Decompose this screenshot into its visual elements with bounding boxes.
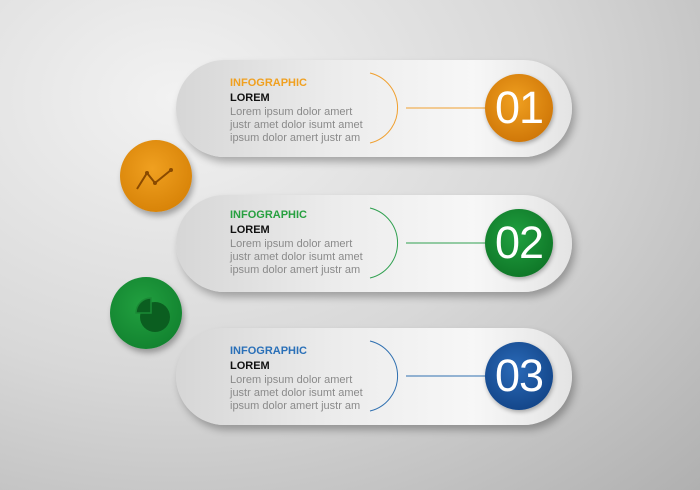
text block 02: INFOGRAPHIC — [230, 209, 307, 221]
panel 03 — [176, 328, 572, 425]
number badge 02: 02 — [495, 217, 543, 268]
text block 01 — [230, 77, 363, 144]
text block 03: justr amet dolor isumt amet — [230, 387, 363, 399]
icon: line chart — [120, 140, 192, 212]
text block 02 — [230, 209, 363, 276]
text block 02: LOREM — [230, 224, 270, 236]
text block 01: LOREM — [230, 92, 270, 104]
panel 02 — [176, 195, 572, 292]
number badge 02 — [485, 209, 553, 277]
text block 01: INFOGRAPHIC — [230, 77, 307, 89]
text block 01: ipsum dolor amert justr am — [230, 132, 360, 144]
number badge 03: 03 — [495, 350, 543, 401]
text block 01: justr amet dolor isumt amet — [230, 119, 363, 131]
text block 01: Lorem ipsum dolor amert — [230, 106, 352, 118]
text block 03 — [230, 345, 363, 412]
text block 03: LOREM — [230, 360, 270, 372]
icon: pie chart — [110, 277, 182, 349]
text block 02: justr amet dolor isumt amet — [230, 251, 363, 263]
panel 01 — [176, 60, 572, 157]
connector 01 — [370, 72, 485, 144]
number badge 01: 01 — [495, 82, 543, 133]
text block 03: ipsum dolor amert justr am — [230, 400, 360, 412]
number badge 03 — [485, 342, 553, 410]
number badge 01 — [485, 74, 553, 142]
connector 02 — [370, 208, 485, 278]
text block 02: ipsum dolor amert justr am — [230, 264, 360, 276]
connector 03 — [370, 340, 485, 412]
text block 02: Lorem ipsum dolor amert — [230, 238, 352, 250]
text block 03: INFOGRAPHIC — [230, 345, 307, 357]
text block 03: Lorem ipsum dolor amert — [230, 374, 352, 386]
